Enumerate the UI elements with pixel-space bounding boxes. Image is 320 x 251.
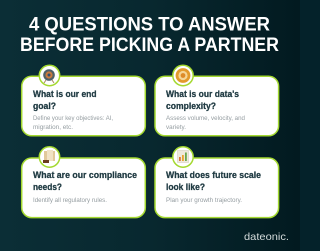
description: migration, etc. xyxy=(33,124,73,131)
question heading: goal? xyxy=(33,101,56,112)
description: Identify all regulatory rules. xyxy=(33,197,107,204)
question heading: needs? xyxy=(33,182,62,193)
title: 4 QUESTIONS TO ANSWER xyxy=(29,14,270,36)
question heading: What is our end xyxy=(33,89,97,100)
icon: spiral xyxy=(173,65,193,86)
logo: dateonic: dateonic. xyxy=(244,231,289,243)
description xyxy=(33,115,113,131)
question heading: What does future scale xyxy=(166,170,261,181)
question heading: What is our data's xyxy=(166,89,239,100)
description: Assess volume, velocity, and xyxy=(166,115,245,122)
question heading xyxy=(33,170,137,193)
description xyxy=(166,115,245,131)
question heading xyxy=(33,89,97,112)
question heading: look like? xyxy=(166,182,205,193)
description: variety. xyxy=(166,124,186,131)
icon: target xyxy=(39,65,60,86)
panel: end goal xyxy=(22,65,145,136)
panel: data complexity xyxy=(155,65,279,136)
question heading: What are our compliance xyxy=(33,170,137,181)
panel: compliance xyxy=(22,147,145,218)
description: Define your key objectives: AI, xyxy=(33,115,113,122)
panel: future scale xyxy=(155,147,279,218)
title xyxy=(20,14,279,56)
title: BEFORE PICKING A PARTNER xyxy=(20,35,279,56)
icon: documents and gavel xyxy=(39,147,60,167)
icon: growth chart xyxy=(173,147,193,167)
question heading xyxy=(166,170,261,193)
description: Plan your growth trajectory. xyxy=(166,197,242,204)
question heading: complexity? xyxy=(166,101,216,112)
question heading xyxy=(166,89,239,112)
